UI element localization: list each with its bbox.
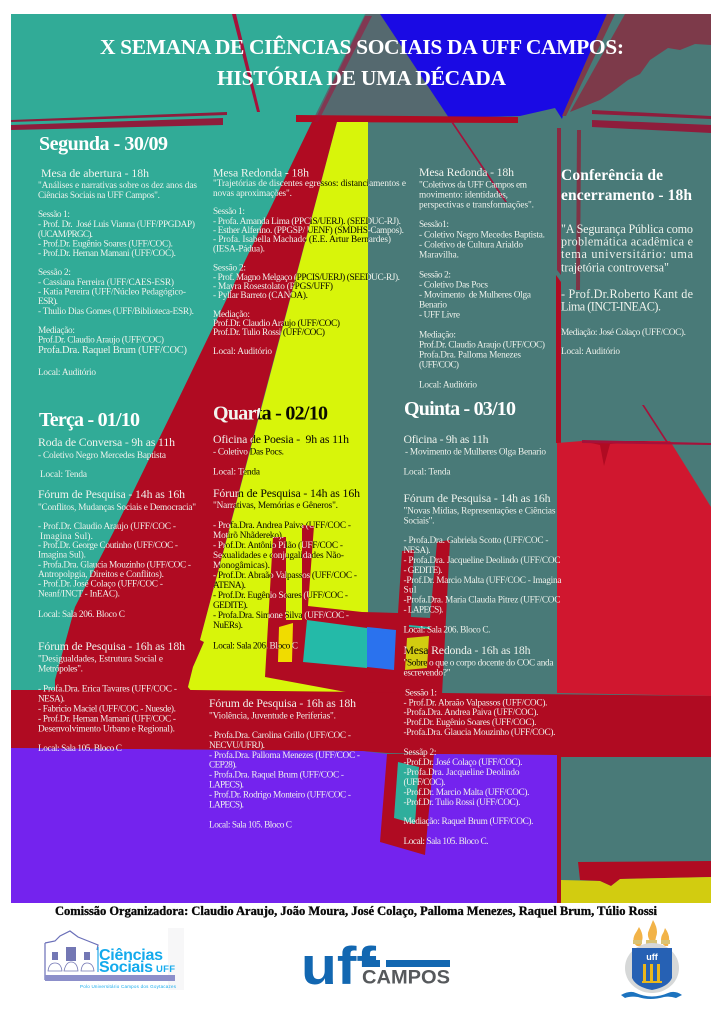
- session: Mesa Redonda Coletivos: perspectivas e transformações".: [419, 200, 534, 210]
- session: Fórum 16h: - Fabricio Maciel (UFF/COC - Nuesde).: [38, 704, 176, 714]
- session: Fórum 16h: "Desigualdades, Estrutura Social e: [38, 654, 163, 664]
- session: Fórum 16h Violência: - Profa.Dra. Carolina Grillo (UFF/COC -: [209, 730, 351, 741]
- session: Fórum 14h Novas Mídias: -Prof.Dr. Marcio Malta (UFF/COC - Imagina: [404, 575, 562, 586]
- conference text: Mediação: José Colaço (UFF/COC).: [561, 327, 686, 338]
- session: Fórum 14h Narrativas: Local: Sala 206. Bloco C: [213, 642, 298, 652]
- session: Fórum 14h: - Profa.Dra. Glaucia Mouzinho (UFF/COC -: [38, 560, 191, 570]
- conference text: "A Segurança Pública como: [561, 222, 693, 236]
- session: Fórum 14h: - Prof.Dr. José Colaço (UFF/COC -: [38, 578, 163, 590]
- session: Oficina de Poesia: Local: Tenda: [213, 468, 260, 478]
- panel: Conferência de encerramento: [561, 167, 694, 357]
- session: Mesa de abertura: Sessão 1:: [38, 210, 70, 220]
- logo: UFF Campos: uff: [301, 937, 376, 996]
- session: Fórum 14h: "Conflitos, Mudanças Sociais e Democracia": [38, 502, 196, 513]
- session: Mesa de abertura: [38, 166, 197, 378]
- session: Fórum 14h Narrativas: - Prof.Dr. Antônio Pilão (UFF/COC -: [213, 540, 343, 551]
- heading: Terça: Terça - 01/10: [39, 409, 140, 431]
- session: Mesa Redonda corpo docente: Sessão 1:: [405, 688, 437, 698]
- session: Fórum 16h: - Prof.Dr. Hernan Mamani (UFF/COC -: [38, 714, 176, 724]
- session: Mesa Redonda Coletivos: [419, 165, 545, 390]
- session: Fórum 14h Novas Mídias: - GEDITE).: [404, 565, 442, 576]
- session: Fórum 14h: Imagina Sul).: [38, 550, 86, 560]
- session: Fórum 14h Narrativas: - Prof.Dr. Abraão Valpassos (UFF/COC -: [213, 570, 357, 581]
- logo: Ciências Sociais UFF: [45, 928, 184, 990]
- session: Fórum 14h Novas Mídias: -Profa.Dra. Maria Claudia Pitrez (UFF/COC: [404, 594, 560, 606]
- session: Mesa de abertura: Mesa de abertura - 18h: [41, 166, 149, 180]
- session: Mesa Redonda corpo docente: Local: Sala 105. Bloco C.: [404, 837, 488, 847]
- session: Mesa Redonda corpo docente: Mesa Redonda - 16h as 18h: [404, 643, 531, 657]
- session: Mesa Redonda Trajetórias: - Prof. Magno Melgaço (PPCIS/UERJ) (SEEDUC-RJ).: [213, 272, 400, 283]
- panel: Quinta 03/10: [404, 398, 562, 847]
- session: Fórum 14h Narrativas: NuERs).: [213, 620, 243, 631]
- heading: Quinta: Quinta - 03/10: [404, 398, 516, 420]
- session: Fórum 14h Novas Mídias: [404, 491, 562, 636]
- session: Mesa Redonda Trajetórias: - Profa. Amanda Lima (PPCIS/UERJ). (SEEDUC-RJ).: [213, 216, 401, 227]
- logo: UFF crest: [621, 920, 682, 999]
- session: Mesa Redonda Coletivos: Local: Auditório: [419, 380, 477, 390]
- logo: UFF Campos: [301, 937, 452, 996]
- session: Mesa Redonda Trajetórias: - Pyllar Barreto (CANOA).: [213, 290, 308, 301]
- session: Fórum 16h Violência: CEP28).: [209, 760, 237, 770]
- logo: Ciências Sociais UFF: Sociais: [99, 959, 153, 976]
- session: Oficina de Poesia: [213, 432, 349, 478]
- session: Mesa Redonda Coletivos: - UFF Livre: [419, 310, 460, 320]
- session: Mesa Redonda Trajetórias: (IESA-Pádua).: [213, 244, 265, 254]
- session: Mesa Redonda corpo docente: "Sobre o que o corpo docente do COC anda: [404, 658, 554, 668]
- heading: Conferência: encerramento - 18h: [561, 187, 692, 204]
- session: Mesa Redonda Trajetórias: Prof.Dr. Tulio Rossi (UFF/COC): [213, 327, 325, 338]
- session: Fórum 16h: Fórum de Pesquisa - 16h as 18h: [38, 639, 185, 653]
- session: Fórum 16h: Local: Sala 105. Bloco C: [38, 744, 122, 754]
- logo: UFF Campos: CAMPOS: [362, 968, 450, 988]
- session: Fórum 14h: - Prof.Dr. Claudio Araujo (UFF/COC -: [38, 521, 176, 532]
- session: Oficina: [404, 432, 546, 478]
- session: Fórum 14h: - Prof.Dr. George Coutinho (UFF/COC -: [38, 540, 178, 551]
- session: Mesa de abertura: Ciências Sociais na UFF Campos".: [38, 191, 160, 201]
- session: Mesa Redonda corpo docente: - Prof.Dr. Abraão Valpassos (UFF/COC).: [404, 698, 548, 708]
- session: Fórum 14h Narrativas: Motirõ Nhãdereko).: [213, 530, 284, 541]
- session: Fórum 16h: [38, 639, 185, 754]
- session: Mesa Redonda Coletivos: Profa.Dra. Palloma Menezes: [419, 350, 521, 360]
- session: Fórum 14h: [38, 487, 196, 620]
- session: Mesa de abertura: Profa.Dra. Raquel Brum (UFF/COC): [38, 345, 187, 356]
- heading: Segunda: Segunda - 30/09: [39, 133, 168, 155]
- session: Mesa Redonda corpo docente: -Prof.Dr. José Colaço (UFF/COC).: [404, 757, 522, 768]
- session: Fórum 14h Novas Mídias: Fórum de Pesquisa - 14h as 16h: [404, 491, 551, 505]
- panel: Quarta 02/10: [209, 402, 360, 830]
- session: Mesa Redonda Coletivos: Mesa Redonda - 18h: [419, 165, 514, 179]
- session: Fórum 16h: Metrópoles".: [38, 664, 83, 674]
- session: Mesa Redonda Coletivos: Mediação:: [419, 330, 456, 340]
- session: Fórum 14h Narrativas: Fórum de Pesquisa - 14h as 16h: [213, 486, 360, 500]
- session: Fórum 14h Novas Mídias: - LAPECS).: [404, 604, 444, 616]
- session: Fórum 14h: Neanf/INCT - InEAC).: [38, 588, 120, 600]
- session: Mesa Redonda Trajetórias: - Esther Alferino. (PPGSP/ UENF) (SMDHS-Campos).: [213, 225, 404, 236]
- session: Fórum 14h Novas Mídias: Sociais".: [404, 516, 434, 526]
- session: Mesa de abertura: - Cassiana Ferreira (UFF/CAES-ESR): [38, 277, 174, 288]
- session: Fórum 14h Narrativas: "Narrativas, Memórias e Gêneros".: [213, 501, 338, 511]
- session: Fórum 14h Novas Mídias: Local: Sala 206. Bloco C.: [404, 626, 490, 636]
- session: Fórum 14h: Antropolpgia, Direitos e Conflitos).: [38, 569, 164, 580]
- session: Oficina: Local: Tenda: [404, 468, 450, 478]
- session: Mesa Redonda Trajetórias: Prof.Dr. Claudio Araujo (UFF/COC): [213, 318, 340, 329]
- session: Fórum 14h Narrativas: GEDITE).: [213, 600, 248, 611]
- session: Fórum 14h Novas Mídias: - Profa.Dra. Jacqueline Deolindo (UFF/COC: [404, 555, 560, 566]
- session: Fórum 14h Novas Mídias: NESA).: [404, 545, 430, 556]
- session: Fórum 14h Narrativas: [213, 486, 360, 652]
- session: Mesa Redonda Trajetórias: "Trajetórias de discentes egressos: distanciamentos e: [213, 179, 406, 189]
- session: Mesa Redonda corpo docente: -Profa.Dra. Jacqueline Deolindo: [404, 767, 520, 778]
- session: Mesa de abertura: (UCAM/PRGC).: [38, 229, 93, 240]
- conference text: Local: Auditório: [561, 347, 620, 357]
- session: Fórum 14h: Fórum de Pesquisa - 14h as 16h: [38, 487, 185, 501]
- session: Mesa Redonda Coletivos: - Coletivo Das Pocs: [419, 280, 488, 290]
- session: Mesa Redonda Trajetórias: [213, 166, 406, 357]
- title: [100, 35, 624, 90]
- session: Mesa Redonda corpo docente: escrevendo?": [404, 668, 451, 678]
- session: Roda de Conversa: - Coletivo Negro Mercedes Baptista: [38, 451, 166, 461]
- session: Fórum 14h Novas Mídias: - Profa.Dra. Gabriela Scotto (UFF/COC -: [404, 535, 548, 546]
- session: Mesa Redonda Trajetórias: Mediação:: [213, 310, 250, 320]
- session: Roda de Conversa: Roda de Conversa - 9h as 11h: [38, 435, 175, 449]
- session: Fórum 14h Narrativas: - Profa.Dra. Simone Silva (UFF/COC -: [213, 610, 349, 621]
- logo: UFF crest: uff: [646, 952, 659, 962]
- session: Mesa de abertura: "Análises e narrativas sobre os dez anos das: [38, 181, 197, 191]
- session: Mesa de abertura: ESR).: [38, 296, 58, 307]
- session: Oficina: Oficina - 9h as 11h: [404, 432, 489, 446]
- session: Mesa Redonda Coletivos: (UFF/COC): [419, 360, 459, 370]
- session: Mesa Redonda Coletivos: "Coletivos da UFF Campos em: [419, 180, 528, 190]
- session: Mesa de abertura: Local: Auditório: [38, 368, 96, 378]
- session: Fórum 16h Violência: - Profa.Dra. Palloma Menezes (UFF/COC -: [209, 750, 360, 761]
- session: Mesa Redonda Coletivos: Benario: [419, 300, 447, 310]
- session: Mesa Redonda Coletivos: Sessão 2:: [419, 270, 451, 280]
- session: Fórum 14h Narrativas: Sexualidades e conjugalidades Não-: [213, 551, 344, 561]
- session: Fórum 16h: Desenvolvimento Urbano e Regional).: [38, 724, 175, 734]
- session: Mesa Redonda Coletivos: Sessão1:: [419, 220, 449, 230]
- panel: Segunda 30/09: [38, 133, 545, 390]
- session: Fórum 16h Violência: LAPECS).: [209, 800, 244, 810]
- session: Oficina: - Movimento de Mulheres Olga Benario: [405, 448, 546, 458]
- session: Fórum 16h Violência: - Profa.Dra. Raquel Brum (UFF/COC -: [209, 770, 344, 780]
- session: Fórum 14h Novas Mídias: Sul: [404, 586, 417, 596]
- session: Mesa Redonda Trajetórias: Sessão 2:: [213, 264, 246, 274]
- session: Oficina de Poesia: Oficina de Poesia - 9h as 11h: [213, 432, 349, 446]
- logo: Ciências Sociais UFF: UFF: [156, 964, 175, 975]
- session: Mesa Redonda Trajetórias: - Profa. Isabella Machado (E.E. Artur Bernardes): [213, 234, 391, 245]
- session: Fórum 16h: NESA).: [38, 694, 65, 704]
- session: Fórum 14h Narrativas: ATENA).: [213, 580, 246, 591]
- session: Fórum 16h Violência: NECVU/UFRJ).: [209, 740, 265, 751]
- session: Mesa Redonda Coletivos: - Coletivo Negro Mecedes Baptista.: [419, 230, 545, 240]
- title: X SEMANA DE CIÊNCIAS SOCIAIS DA UFF CAMPOS:: [100, 35, 624, 59]
- session: Roda de Conversa: [38, 435, 175, 480]
- session: Mesa de abertura: Sessão 2:: [38, 268, 71, 278]
- session: Mesa Redonda Trajetórias: Mesa Redonda - 18h: [213, 166, 309, 180]
- session: Mesa Redonda corpo docente: -Prof.Dr. Tulio Rossi (UFF/COC).: [404, 797, 520, 808]
- session: Mesa Redonda Trajetórias: novas aproximações".: [213, 189, 292, 199]
- session: Mesa Redonda corpo docente: Sessãp 2:: [404, 748, 436, 758]
- session: Mesa Redonda Coletivos: - Coletivo de Cultura Arialdo: [419, 240, 523, 250]
- session: Mesa Redonda corpo docente: [404, 643, 556, 847]
- conference text: - Prof.Dr.Roberto Kant de: [561, 287, 693, 301]
- session: Fórum 16h Violência: LAPECS).: [209, 780, 244, 790]
- session: Mesa Redonda corpo docente: Mediação: Raquel Brum (UFF/COC).: [404, 816, 534, 827]
- session: Mesa Redonda Trajetórias: Sessão 1:: [213, 207, 245, 217]
- session: Mesa Redonda corpo docente: -Prof.Dr. Eugênio Soares (UFF/COC).: [404, 717, 536, 728]
- session: Mesa Redonda corpo docente: -Profa.Dra. Glaucia Mouzinho (UFF/COC).: [404, 727, 556, 738]
- heading: Conferência: [561, 167, 692, 204]
- session: Fórum 14h Narrativas: - Profa.Dra. Andrea Paiva (UFF/COC -: [213, 520, 351, 531]
- conference text: Lima (INCT-INEAC).: [561, 300, 661, 314]
- session: Oficina de Poesia: - Coletivo Das Pocs.: [213, 448, 284, 458]
- session: Mesa de abertura: Mediação:: [38, 326, 75, 336]
- session: Roda de Conversa: Local: Tenda: [40, 470, 87, 480]
- session: Mesa Redonda corpo docente: -Prof.Dr. Marcio Malta (UFF/COC).: [404, 787, 530, 798]
- session: Fórum 16h Violência: Local: Sala 105. Bloco C: [209, 820, 292, 830]
- conference text: problemática acadêmica e: [561, 234, 693, 248]
- session: Mesa Redonda Coletivos: Maravilha.: [419, 250, 459, 260]
- conference text: [561, 222, 694, 357]
- session: Mesa Redonda Coletivos: movimento: identidades,: [419, 190, 508, 200]
- conference text: tema universitário: uma: [561, 247, 694, 261]
- panel: Terça 01/10: [38, 409, 196, 754]
- session: Mesa de abertura: Prof.Dr. Claudio Araujo (UFF/COC): [38, 334, 164, 346]
- session: Mesa de abertura: - Katia Pereira (UFF/Núcleo Pedagógico-: [38, 286, 186, 298]
- session: Mesa de abertura: - Thulio Dias Gomes (UFF/Biblioteca-ESR).: [38, 306, 194, 317]
- session: Mesa de abertura: - Prof.Dr. Hernan Mamani (UFF/COC).: [38, 248, 176, 259]
- session: Mesa Redonda Trajetórias: - Mayra Rosestolato (PPGS/UFF): [213, 281, 333, 292]
- session: Fórum 16h Violência: "Violência, Juventude e Periferias".: [209, 710, 336, 722]
- session: Fórum 14h Narrativas: - Prof.Dr. Eugênio Soares (UFF/COC -: [213, 590, 348, 601]
- title: HISTÓRIA DE UMA DÉCADA: [217, 66, 506, 90]
- session: Fórum 16h Violência: Fórum de Pesquisa - 16h as 18h: [209, 696, 356, 710]
- session: Mesa de abertura: - Prof.Dr. Eugênio Soares (UFF/COC).: [38, 238, 173, 250]
- conference text: trajetória controversa": [561, 260, 669, 274]
- heading: Quarta: Quarta - 02/10: [213, 402, 328, 424]
- session: Mesa de abertura: - Prof. Dr. José Luis Vianna (UFF/PPGDAP): [38, 219, 195, 230]
- session: Fórum 14h Novas Mídias: "Novas Mídias, Representações e Ciências: [404, 506, 556, 516]
- session: Mesa Redonda Trajetórias: Local: Auditório: [213, 347, 272, 357]
- session: Mesa Redonda corpo docente: (UFF/COC).: [404, 777, 446, 788]
- session: Fórum 14h: Imagina Sul).: [40, 531, 93, 542]
- session: Fórum 16h: - Profa.Dra. Erica Tavares (UFF/COC -: [38, 684, 177, 694]
- heading: Conferência: Conferência de: [561, 167, 663, 184]
- session: Fórum 16h Violência: - Prof.Dr. Rodrigo Monteiro (UFF/COC -: [209, 790, 351, 800]
- session: Fórum 16h Violência: [209, 696, 360, 830]
- session: Mesa Redonda corpo docente: -Profa.Dra. Andrea Paiva (UFF/COC).: [404, 707, 538, 718]
- organizing committee: Comissão Organizadora: Claudio Araujo, João Moura, José Colaço, Palloma Menezes, Raquel Brum, Túlio Rossi: [55, 904, 658, 918]
- session: Mesa Redonda Coletivos: - Movimento de Mulheres Olga: [419, 290, 531, 300]
- logo: Ciências Sociais UFF: Ciências: [99, 947, 163, 964]
- session: Fórum 14h Narrativas: Monogâmicas).: [213, 560, 270, 571]
- logo: Ciências Sociais UFF: Polo Universitário Campos dos Goytacazes: [80, 984, 177, 989]
- session: Fórum 14h: Local: Sala 206. Bloco C: [38, 610, 125, 620]
- session: Mesa Redonda Coletivos: Prof.Dr. Claudio Araujo (UFF/COC): [419, 340, 545, 350]
